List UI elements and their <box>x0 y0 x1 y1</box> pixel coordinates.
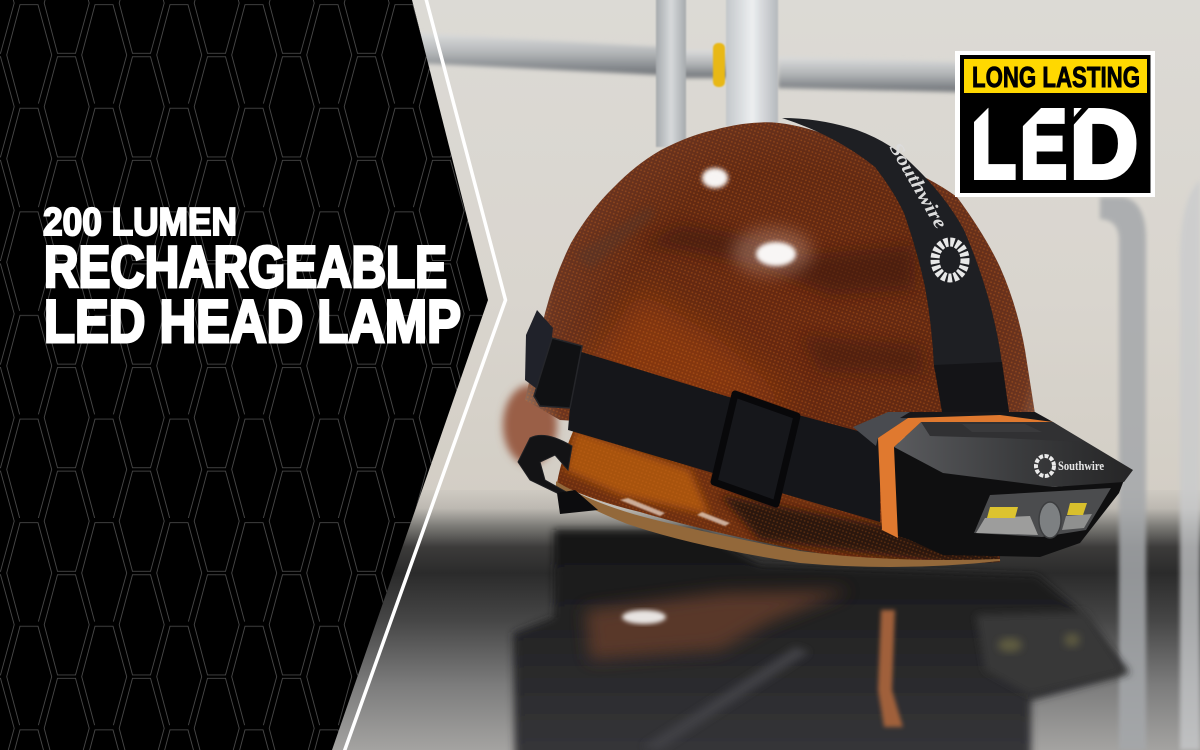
left brim blur <box>503 385 557 465</box>
yellow fitting <box>713 43 725 87</box>
lamp front body <box>890 440 1124 557</box>
left buckle <box>534 338 582 408</box>
top dark edge <box>900 412 1053 422</box>
yellow LED right <box>1067 503 1087 515</box>
left horizontal pipe <box>415 33 660 75</box>
under clip <box>557 490 598 514</box>
background pipes <box>415 0 1200 750</box>
badge heading: LONG LASTING <box>972 62 1140 94</box>
brim tan edge <box>557 483 1000 566</box>
side cap <box>853 412 943 446</box>
right elbow pipe <box>1100 197 1146 750</box>
helmet <box>503 110 1050 570</box>
photo background: wall and floor <box>300 0 1200 750</box>
strap logo <box>935 242 965 278</box>
LED window <box>974 488 1111 537</box>
vertical head strap <box>782 118 1009 412</box>
headlamp <box>853 412 1133 557</box>
lower clip <box>518 435 572 494</box>
dome highlights <box>702 168 812 276</box>
strap wordmark: Southwire <box>885 139 951 233</box>
black arrow panel with hexagon pattern <box>0 0 488 750</box>
brand logo <box>1036 456 1054 476</box>
control buttons <box>962 424 1042 432</box>
right horizontal pipe <box>778 57 960 92</box>
top face <box>894 422 1133 487</box>
white chevron line <box>343 0 506 750</box>
horizontal elastic strap and buckles <box>518 310 880 522</box>
centre lens <box>1039 502 1061 538</box>
title <box>43 201 461 355</box>
vertical pipe one <box>656 0 686 147</box>
title line 1: 200 LUMEN <box>43 201 237 244</box>
title line 2: RECHARGEABLE <box>44 235 447 300</box>
far right pipe <box>1180 180 1200 750</box>
centre short pipe <box>660 50 730 78</box>
badge LED word: E <box>1020 90 1067 198</box>
badge LED word: D <box>1070 90 1138 198</box>
orange trim <box>878 415 1053 538</box>
brand name: Southwire <box>1058 458 1104 473</box>
badge LED word: L <box>971 90 1016 198</box>
slider buckle <box>714 394 797 504</box>
badge: long lasting LED <box>955 51 1155 198</box>
brim underside <box>557 432 1000 563</box>
left reflector <box>976 516 1038 535</box>
strap tail <box>525 310 553 395</box>
badge letter cuts <box>966 102 1094 134</box>
yellow LED left <box>987 507 1018 518</box>
dome <box>525 122 1035 437</box>
badge LED word <box>971 90 1138 198</box>
vertical pipe two <box>726 0 778 126</box>
floor reflection of helmet and lamp <box>513 530 1130 750</box>
title line 3: LED HEAD LAMP <box>44 288 461 355</box>
right reflector <box>1062 514 1092 530</box>
